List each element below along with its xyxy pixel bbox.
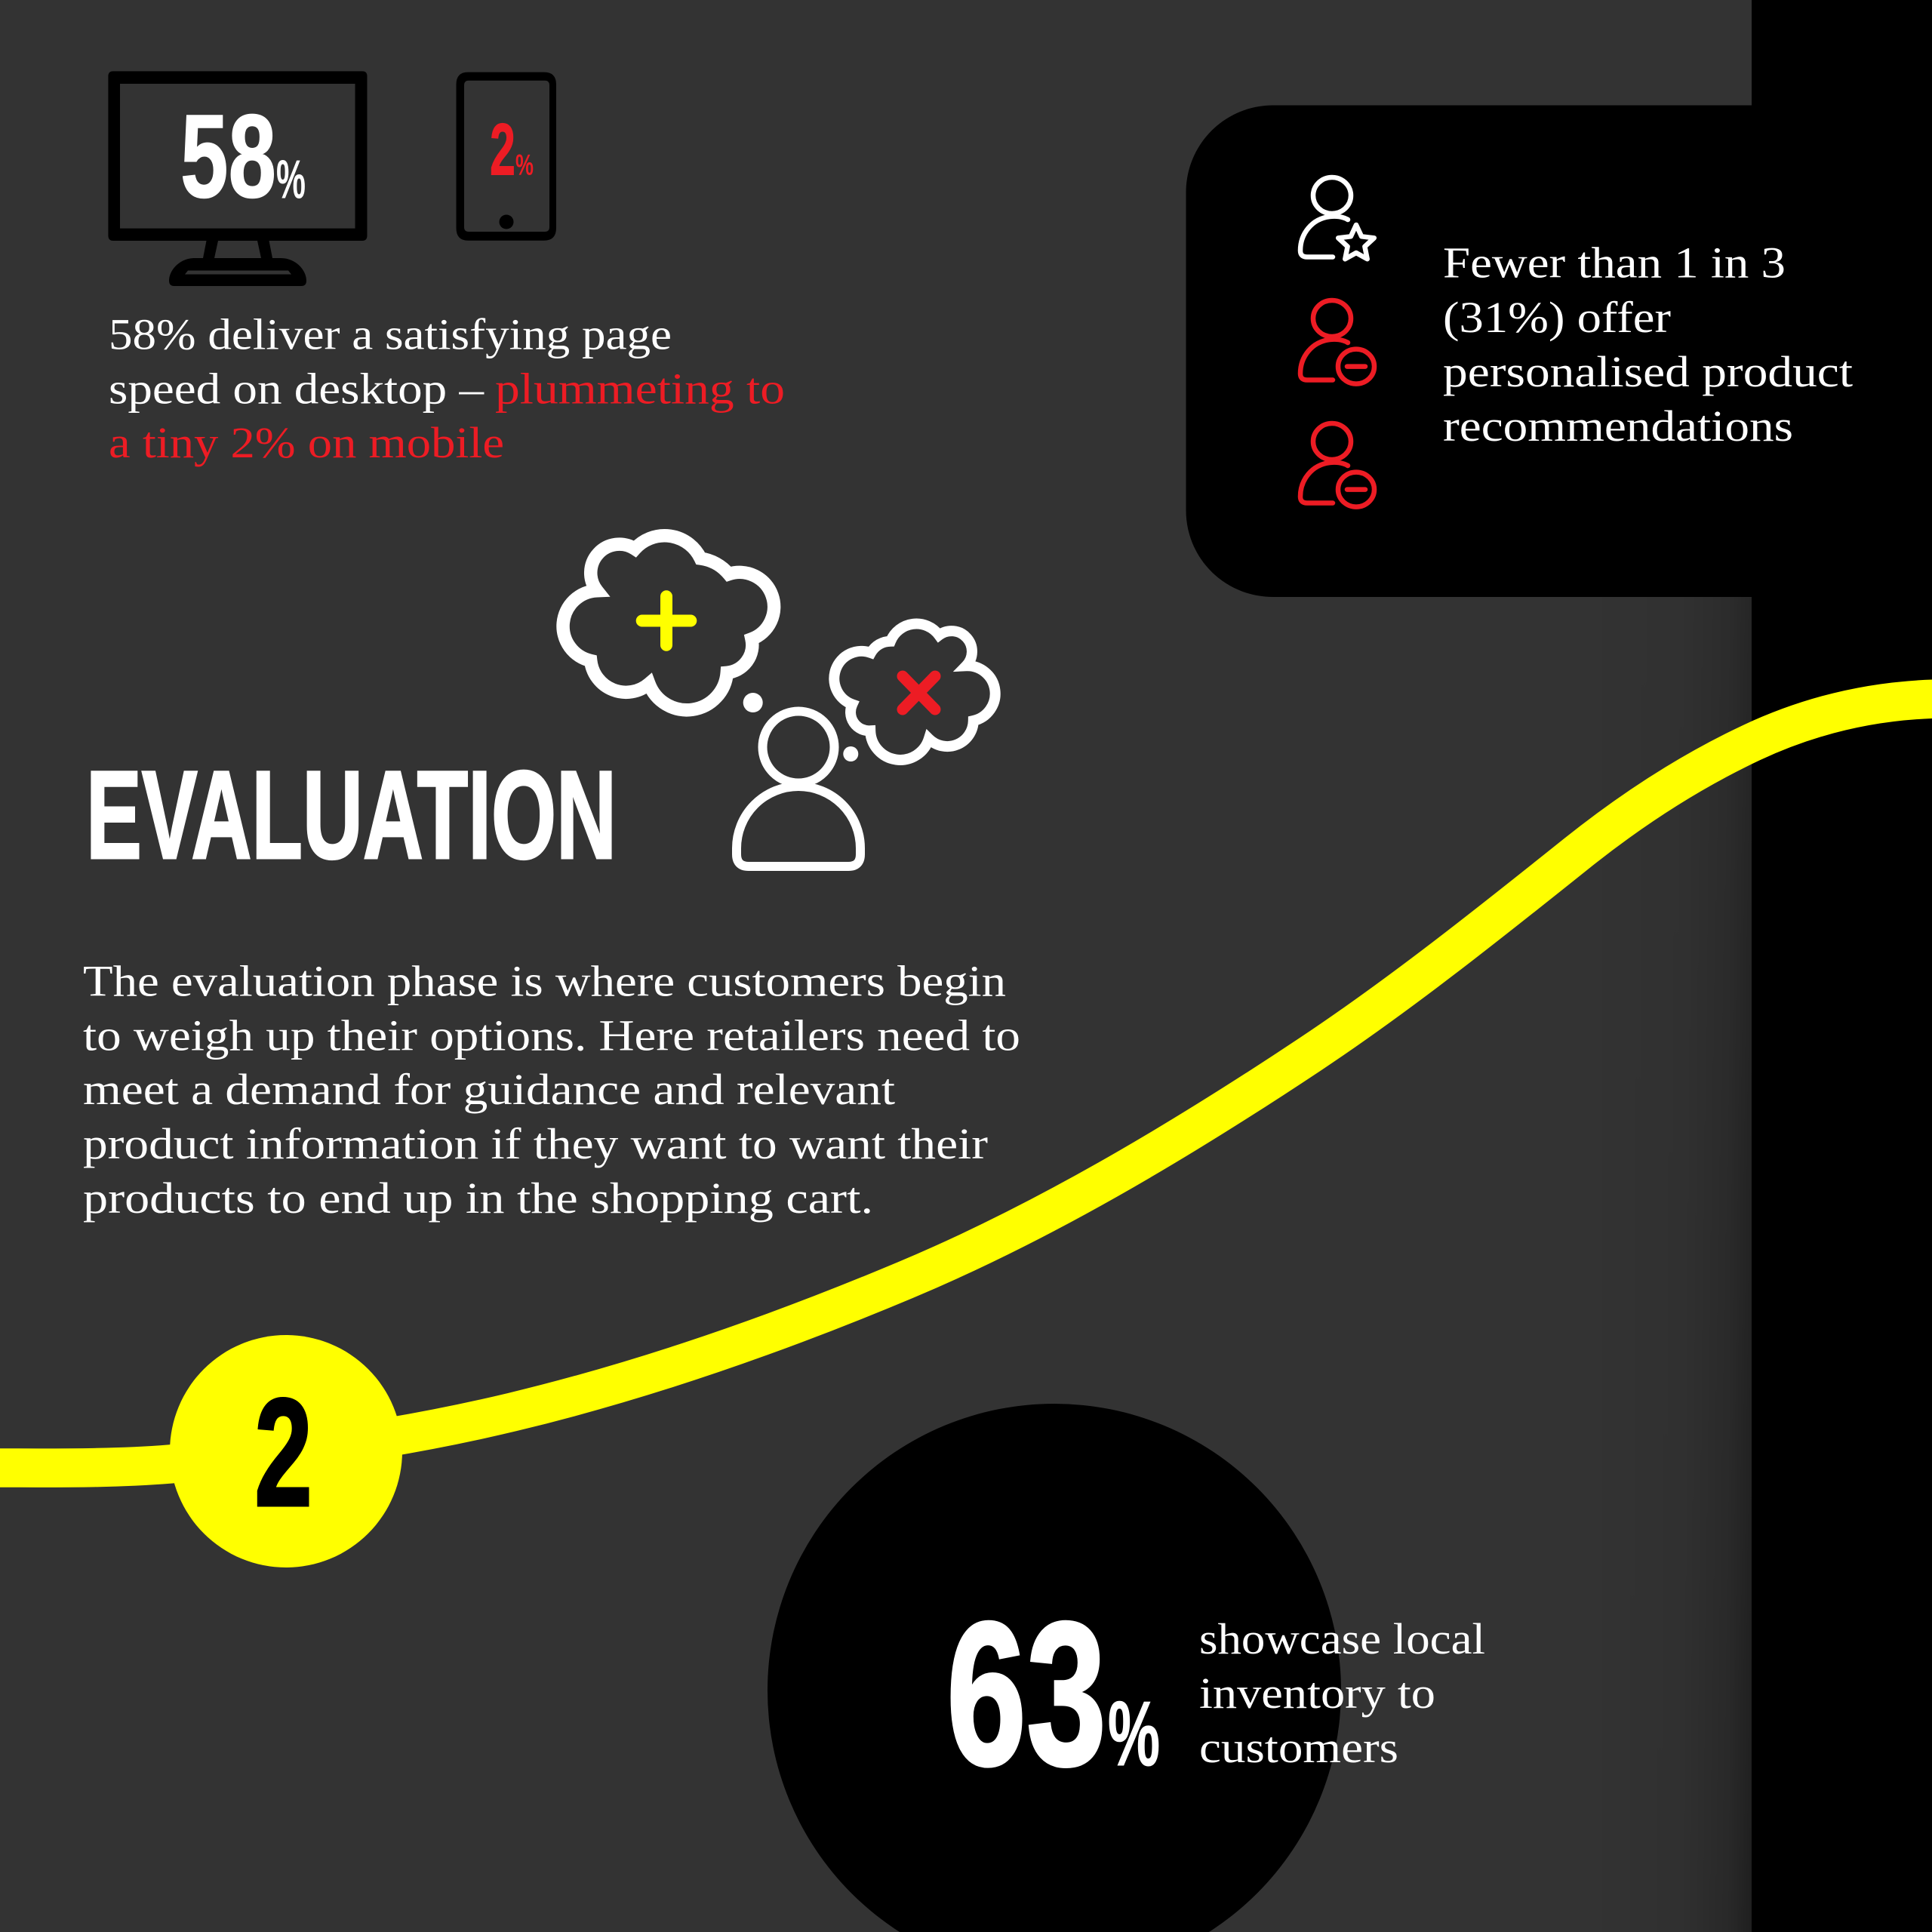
text: evaluation description [83,957,1020,1223]
stat: 2 percent: % [515,149,534,181]
panel: personalised recommendations [1186,106,1853,597]
text: evaluation description: products to end up in the shopping cart. [83,1174,873,1223]
text: personalised recommendations: personalised product [1443,347,1853,396]
text: page speed: a tiny 2% on mobile [109,418,504,467]
stat: 63 percent: % [1108,1682,1160,1785]
icon: large thought cloud [563,536,774,710]
text: evaluation description: meet a demand for guidance and relevant [83,1065,895,1114]
text: local inventory: showcase local [1199,1614,1485,1663]
icon: mobile phone [456,72,556,241]
text: evaluation description: The evaluation phase is where customers begin [83,957,1006,1005]
icon: person with minus 2 [1300,423,1374,507]
text: page speed [109,309,785,467]
step number 2: 2 [254,1367,312,1539]
stat: 58 percent: % [276,149,306,210]
text: local inventory: inventory to [1199,1669,1435,1718]
text: evaluation description: product information if they want to want their [83,1119,988,1168]
yellow journey curve [0,699,1932,1468]
icon: small thought cloud [834,624,995,760]
icon: person with minus 1 [1300,300,1374,384]
thought bubble dots [743,693,858,761]
strip shadow [1715,597,1752,1932]
text: page speed: plummeting to [495,364,785,414]
icon: person with thought clouds [563,536,995,866]
stat: 58 percent: 58 [180,91,276,223]
icon: person [737,711,860,866]
text: personalised recommendations: Fewer than 1 in 3 [1443,238,1786,288]
stat: 2 percent: 2 [490,109,515,190]
text: page speed: speed on desktop – [109,364,485,414]
text: local inventory [1199,1614,1485,1772]
icon: cross [903,676,935,709]
icon: person with star [1300,177,1374,259]
text: local inventory: customers [1199,1723,1398,1772]
big black circle [768,1404,1341,1932]
icon: desktop monitor [108,71,367,286]
text: personalised recommendations: recommendations [1443,401,1793,451]
text: personalised recommendations [1443,238,1853,451]
icon: plus [642,596,691,645]
step number 2 [170,1335,402,1567]
black right strip [1752,0,1932,1932]
stat: 63 percent: 63 [946,1580,1106,1808]
text: evaluation description: to weigh up their options. Here retailers need to [83,1011,1020,1060]
heading: EVALUATION [86,746,617,885]
text: page speed: 58% deliver a satisfying page [109,309,672,359]
text: personalised recommendations: (31%) offer [1443,293,1671,342]
